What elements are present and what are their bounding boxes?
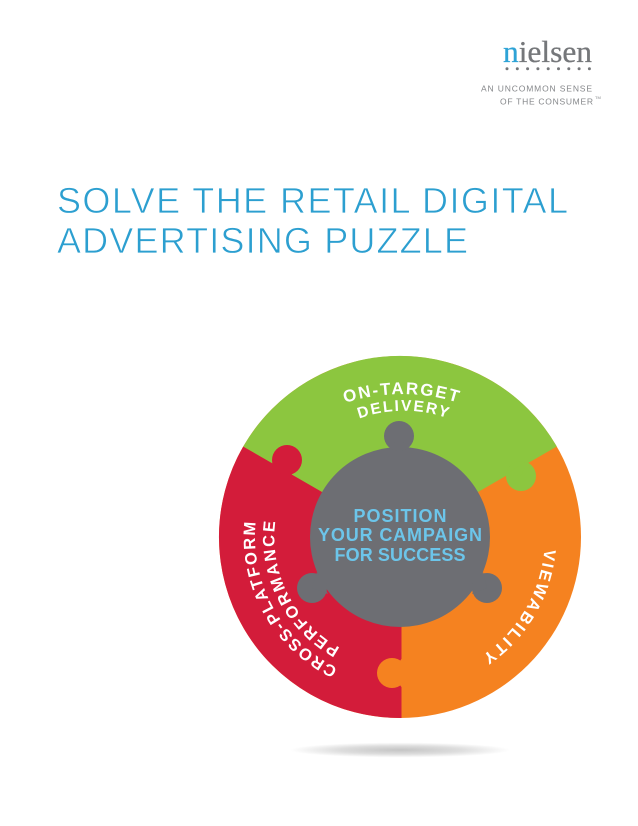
center text: YOUR CAMPAIGN (318, 525, 482, 545)
knob: hub top (384, 421, 414, 451)
logo tagline: AN UNCOMMON SENSE (481, 84, 592, 94)
heading: cross-platform performance: PERFORMANCE (262, 522, 339, 658)
title: ADVERTISING PUZZLE (57, 220, 468, 261)
title (57, 180, 568, 261)
ground shadow (290, 742, 510, 758)
logo dots (506, 67, 591, 70)
center text: FOR SUCCESS (334, 545, 466, 565)
knob: orange into red (377, 658, 407, 688)
title: SOLVE THE RETAIL DIGITAL (57, 180, 568, 221)
knob: hub left (297, 572, 328, 603)
logo tagline: OF THE CONSUMER (500, 96, 593, 106)
logo tagline (481, 84, 601, 106)
panel: center hub (297, 421, 502, 627)
logo: nielsen (481, 34, 601, 106)
knob: red into green (272, 445, 302, 475)
puzzle wheel (218, 356, 581, 718)
panel: viewability piece (219, 356, 581, 718)
logo tagline: TM (595, 95, 601, 100)
panel: cross-platform performance piece (219, 446, 402, 718)
logo wordmark: nielsen (503, 34, 593, 69)
heading: viewability: VIEWABILITY (486, 550, 556, 665)
heading: on-target delivery (344, 382, 460, 418)
heading: cross-platform performance: CROSS-PLATFORM (244, 522, 336, 676)
heading: on-target delivery: ON-TARGET (344, 382, 460, 402)
heading: on-target delivery: DELIVERY (357, 400, 450, 418)
knob: hub right (472, 572, 502, 603)
knob: green into orange (505, 460, 536, 491)
panel: on-target delivery piece (243, 356, 557, 537)
center text (318, 506, 482, 565)
center text: POSITION (354, 506, 446, 526)
